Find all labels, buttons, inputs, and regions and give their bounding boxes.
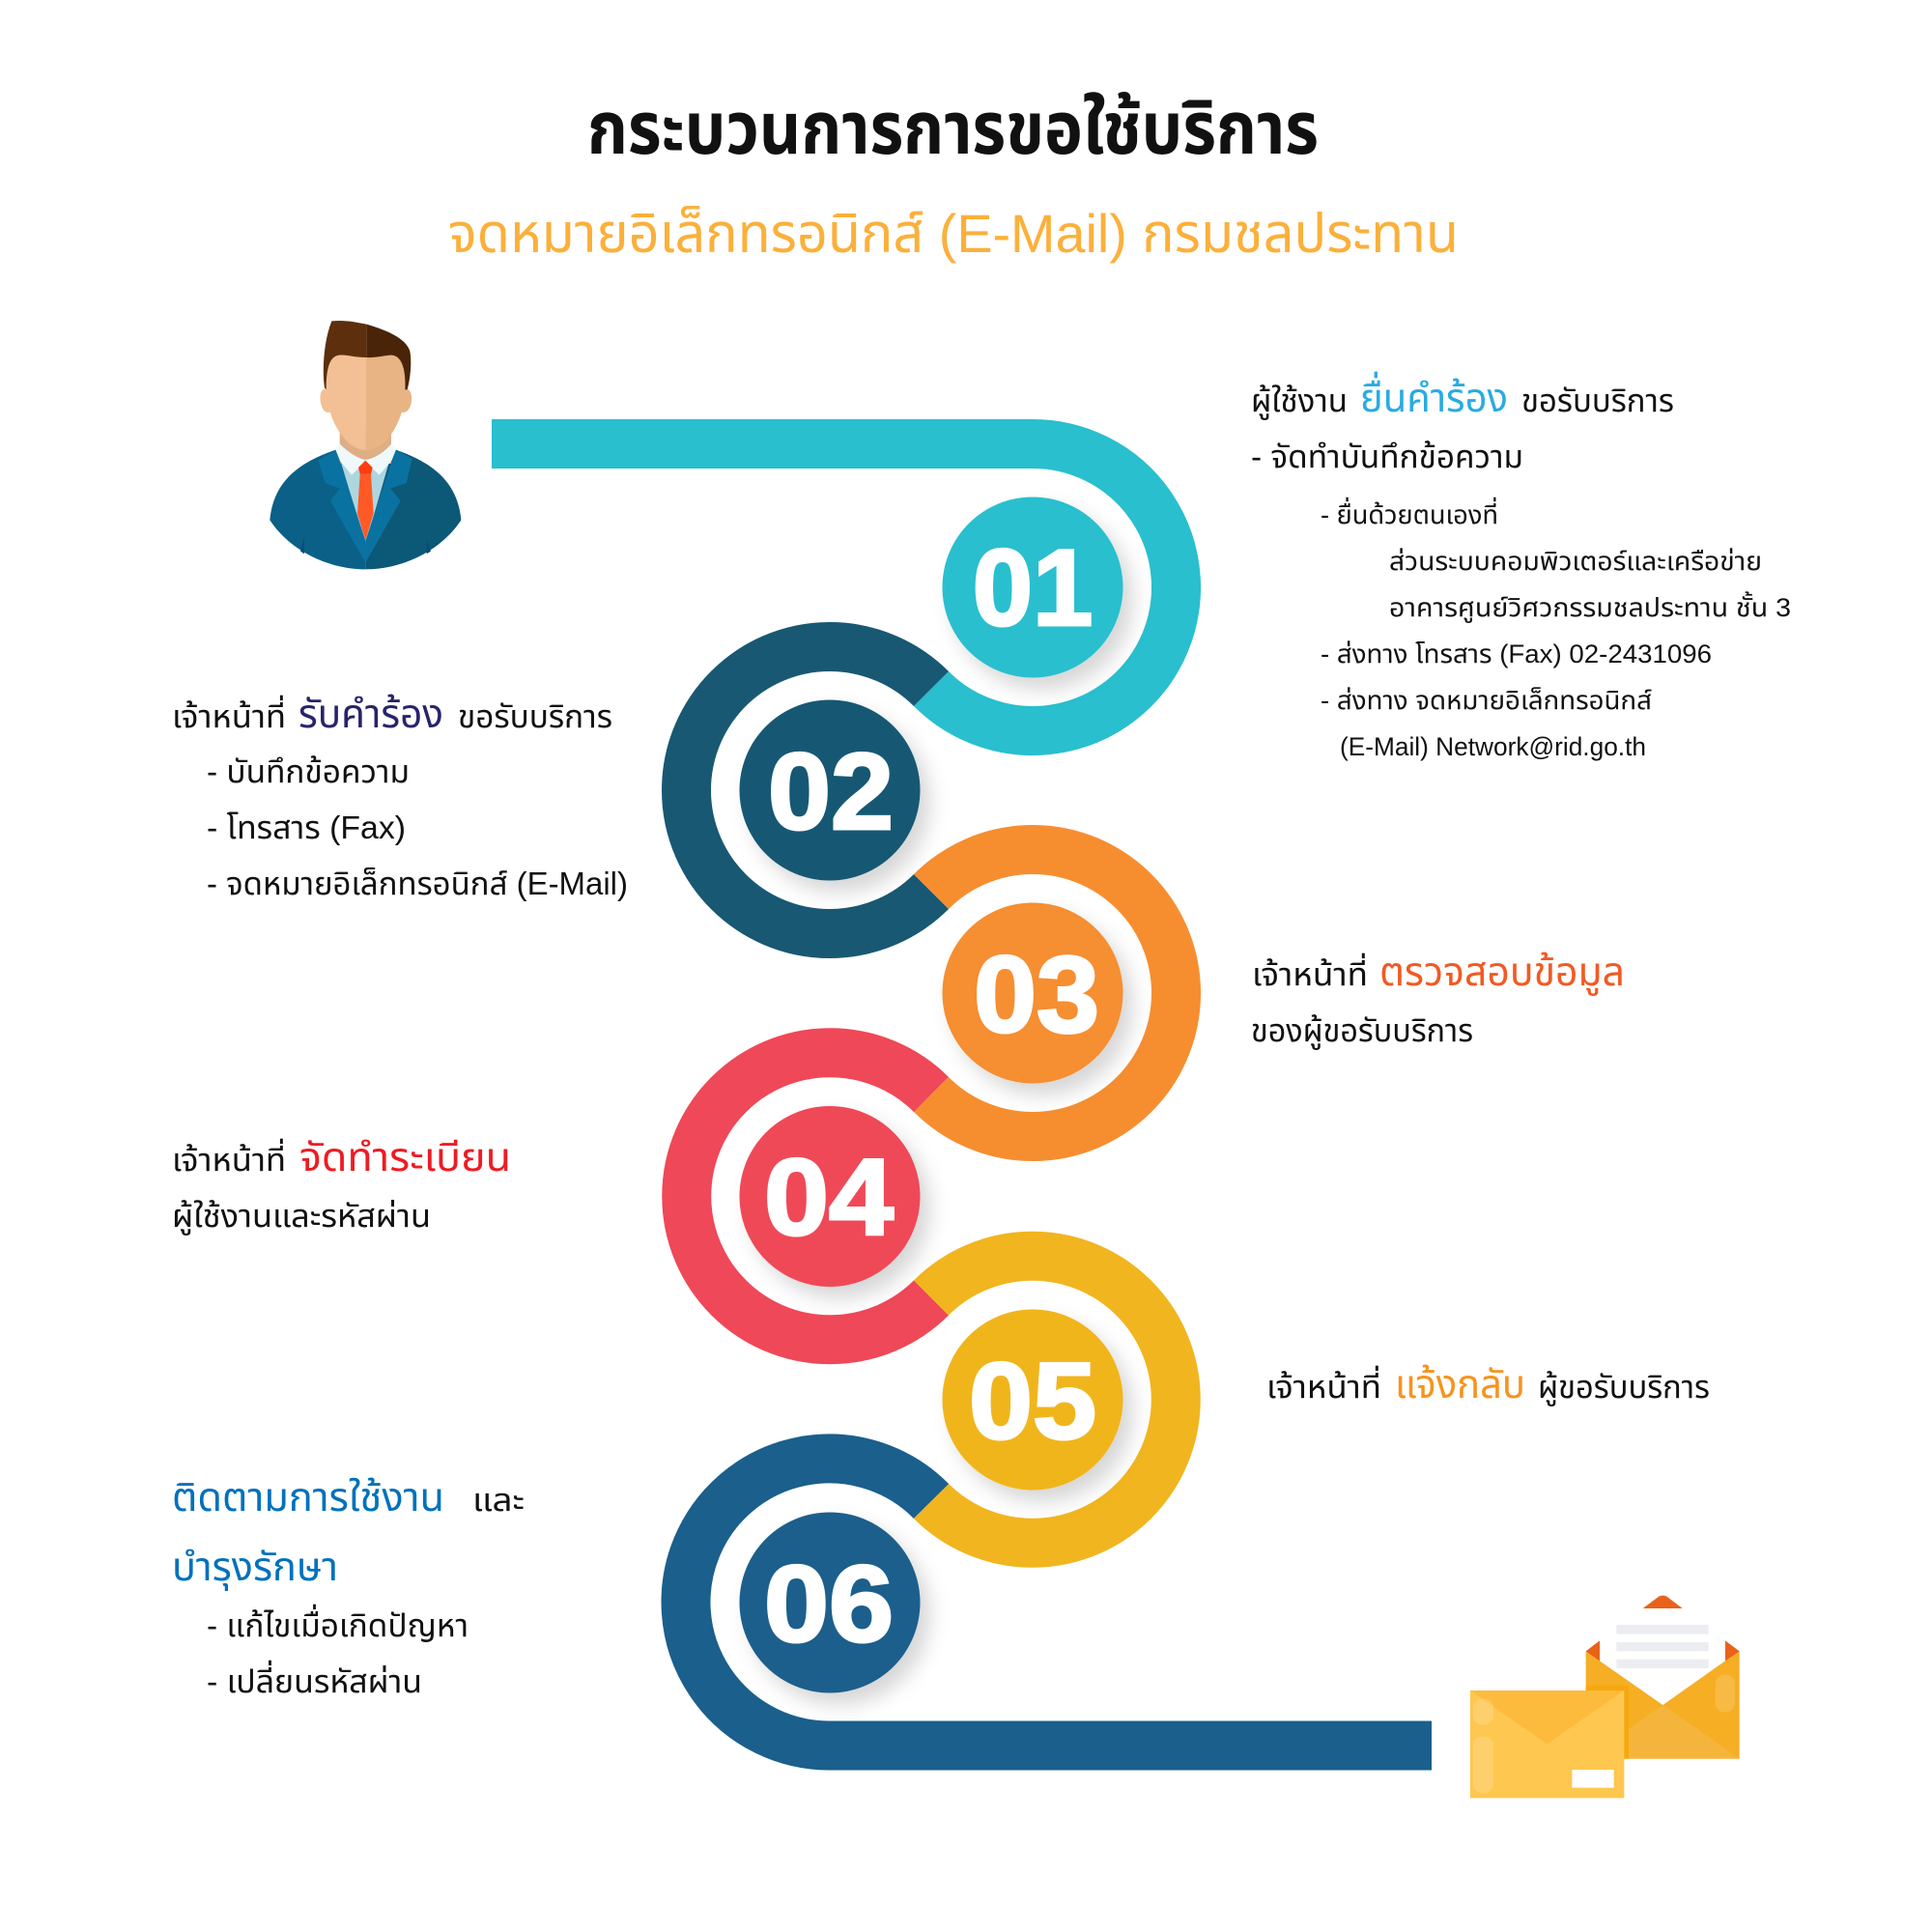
text block: step 02: ขอรับบริการ bbox=[458, 698, 612, 734]
path segment 06 bbox=[686, 1459, 1432, 1746]
text block: step 01: (E-Mail) Network@rid.go.th bbox=[1340, 732, 1646, 761]
step badge 01 bbox=[943, 497, 1122, 678]
text block: step 04 bbox=[172, 1135, 511, 1236]
text block: step 02: เจ้าหน้าที่ bbox=[172, 695, 286, 734]
step badge 06 bbox=[740, 1513, 920, 1692]
step badge 04: 04 bbox=[764, 1137, 894, 1258]
step badge 04 bbox=[740, 1106, 920, 1287]
text block: step 01: - จัดทำบันทึกข้อความ bbox=[1251, 439, 1523, 474]
icon: envelopes bbox=[1470, 1596, 1740, 1798]
text block: step 04: จัดทำระเบียน bbox=[299, 1135, 511, 1179]
icon: businessman bbox=[270, 321, 461, 569]
path segment 04 bbox=[687, 1053, 931, 1340]
step badge 02: 02 bbox=[768, 731, 894, 852]
text block: step 05: ผู้ขอรับบริการ bbox=[1538, 1369, 1710, 1406]
step badge 05: 05 bbox=[969, 1341, 1096, 1462]
text block: step 01 bbox=[1251, 371, 1791, 761]
step badge 01: 01 bbox=[973, 527, 1093, 648]
text block: step 01: - ส่งทาง จดหมายอิเล็กทรอนิกส์ bbox=[1321, 686, 1652, 715]
path segment 03 bbox=[931, 850, 1177, 1136]
text block: step 06: ติดตามการใช้งาน bbox=[172, 1475, 444, 1520]
step badge 06: 06 bbox=[764, 1544, 894, 1664]
title: กระบวนการการขอใช้บริการ bbox=[587, 88, 1319, 170]
text block: step 06: - แก้ไขเมื่อเกิดปัญหา bbox=[207, 1604, 469, 1643]
text block: step 01: - ส่งทาง โทรสาร (Fax) 02-2431096 bbox=[1321, 639, 1712, 668]
text block: step 01: อาคารศูนย์วิศวกรรมชลประทาน ชั้น 3 bbox=[1389, 591, 1791, 623]
step badge 03 bbox=[943, 902, 1122, 1084]
path segment 02 bbox=[686, 647, 931, 933]
text block: step 02: - จดหมายอิเล็กทรอนิกส์ (E-Mail) bbox=[207, 866, 628, 901]
text block: step 01: ขอรับบริการ bbox=[1521, 383, 1674, 418]
text block: step 03: เจ้าหน้าที่ bbox=[1252, 952, 1368, 992]
text block: step 02: - บันทึกข้อความ bbox=[207, 753, 410, 789]
text block: step 02: รับคำร้อง bbox=[298, 692, 443, 736]
text block: step 06: และ bbox=[472, 1482, 525, 1518]
text block: step 01: ส่วนระบบคอมพิวเตอร์และเครือข่าย bbox=[1389, 547, 1762, 576]
text block: step 03 bbox=[1251, 950, 1625, 1050]
text block: step 01: - ยื่นด้วยตนเองที่ bbox=[1321, 497, 1498, 529]
step badge 05 bbox=[943, 1310, 1122, 1490]
text block: step 05: แจ้งกลับ bbox=[1395, 1362, 1525, 1406]
text block: step 06: - เปลี่ยนรหัสผ่าน bbox=[207, 1660, 422, 1699]
text block: step 05 bbox=[1266, 1362, 1710, 1406]
text block: step 01: ผู้ใช้งาน bbox=[1251, 383, 1348, 420]
text block: step 02 bbox=[172, 692, 628, 901]
text block: step 06: บำรุงรักษา bbox=[172, 1545, 338, 1591]
text block: step 04: ผู้ใช้งานและรหัสผ่าน bbox=[172, 1198, 431, 1236]
text block: step 01: ยื่นคำร้อง bbox=[1360, 371, 1508, 420]
text block: step 06 bbox=[172, 1475, 525, 1699]
text block: step 05: เจ้าหน้าที่ bbox=[1266, 1365, 1381, 1405]
path segment 05 bbox=[931, 1256, 1176, 1543]
subtitle: จดหมายอิเล็กทรอนิกส์ (E-Mail) กรมชลประทาน bbox=[448, 203, 1459, 264]
text block: step 03: ของผู้ขอรับบริการ bbox=[1251, 1012, 1473, 1050]
text block: step 04: เจ้าหน้าที่ bbox=[172, 1138, 286, 1178]
path segment 01 bbox=[492, 444, 1177, 730]
text block: step 03: ตรวจสอบข้อมูล bbox=[1379, 950, 1625, 996]
text block: step 02: - โทรสาร (Fax) bbox=[207, 810, 406, 845]
step badge 03: 03 bbox=[974, 934, 1099, 1055]
step badge 02 bbox=[740, 699, 920, 881]
